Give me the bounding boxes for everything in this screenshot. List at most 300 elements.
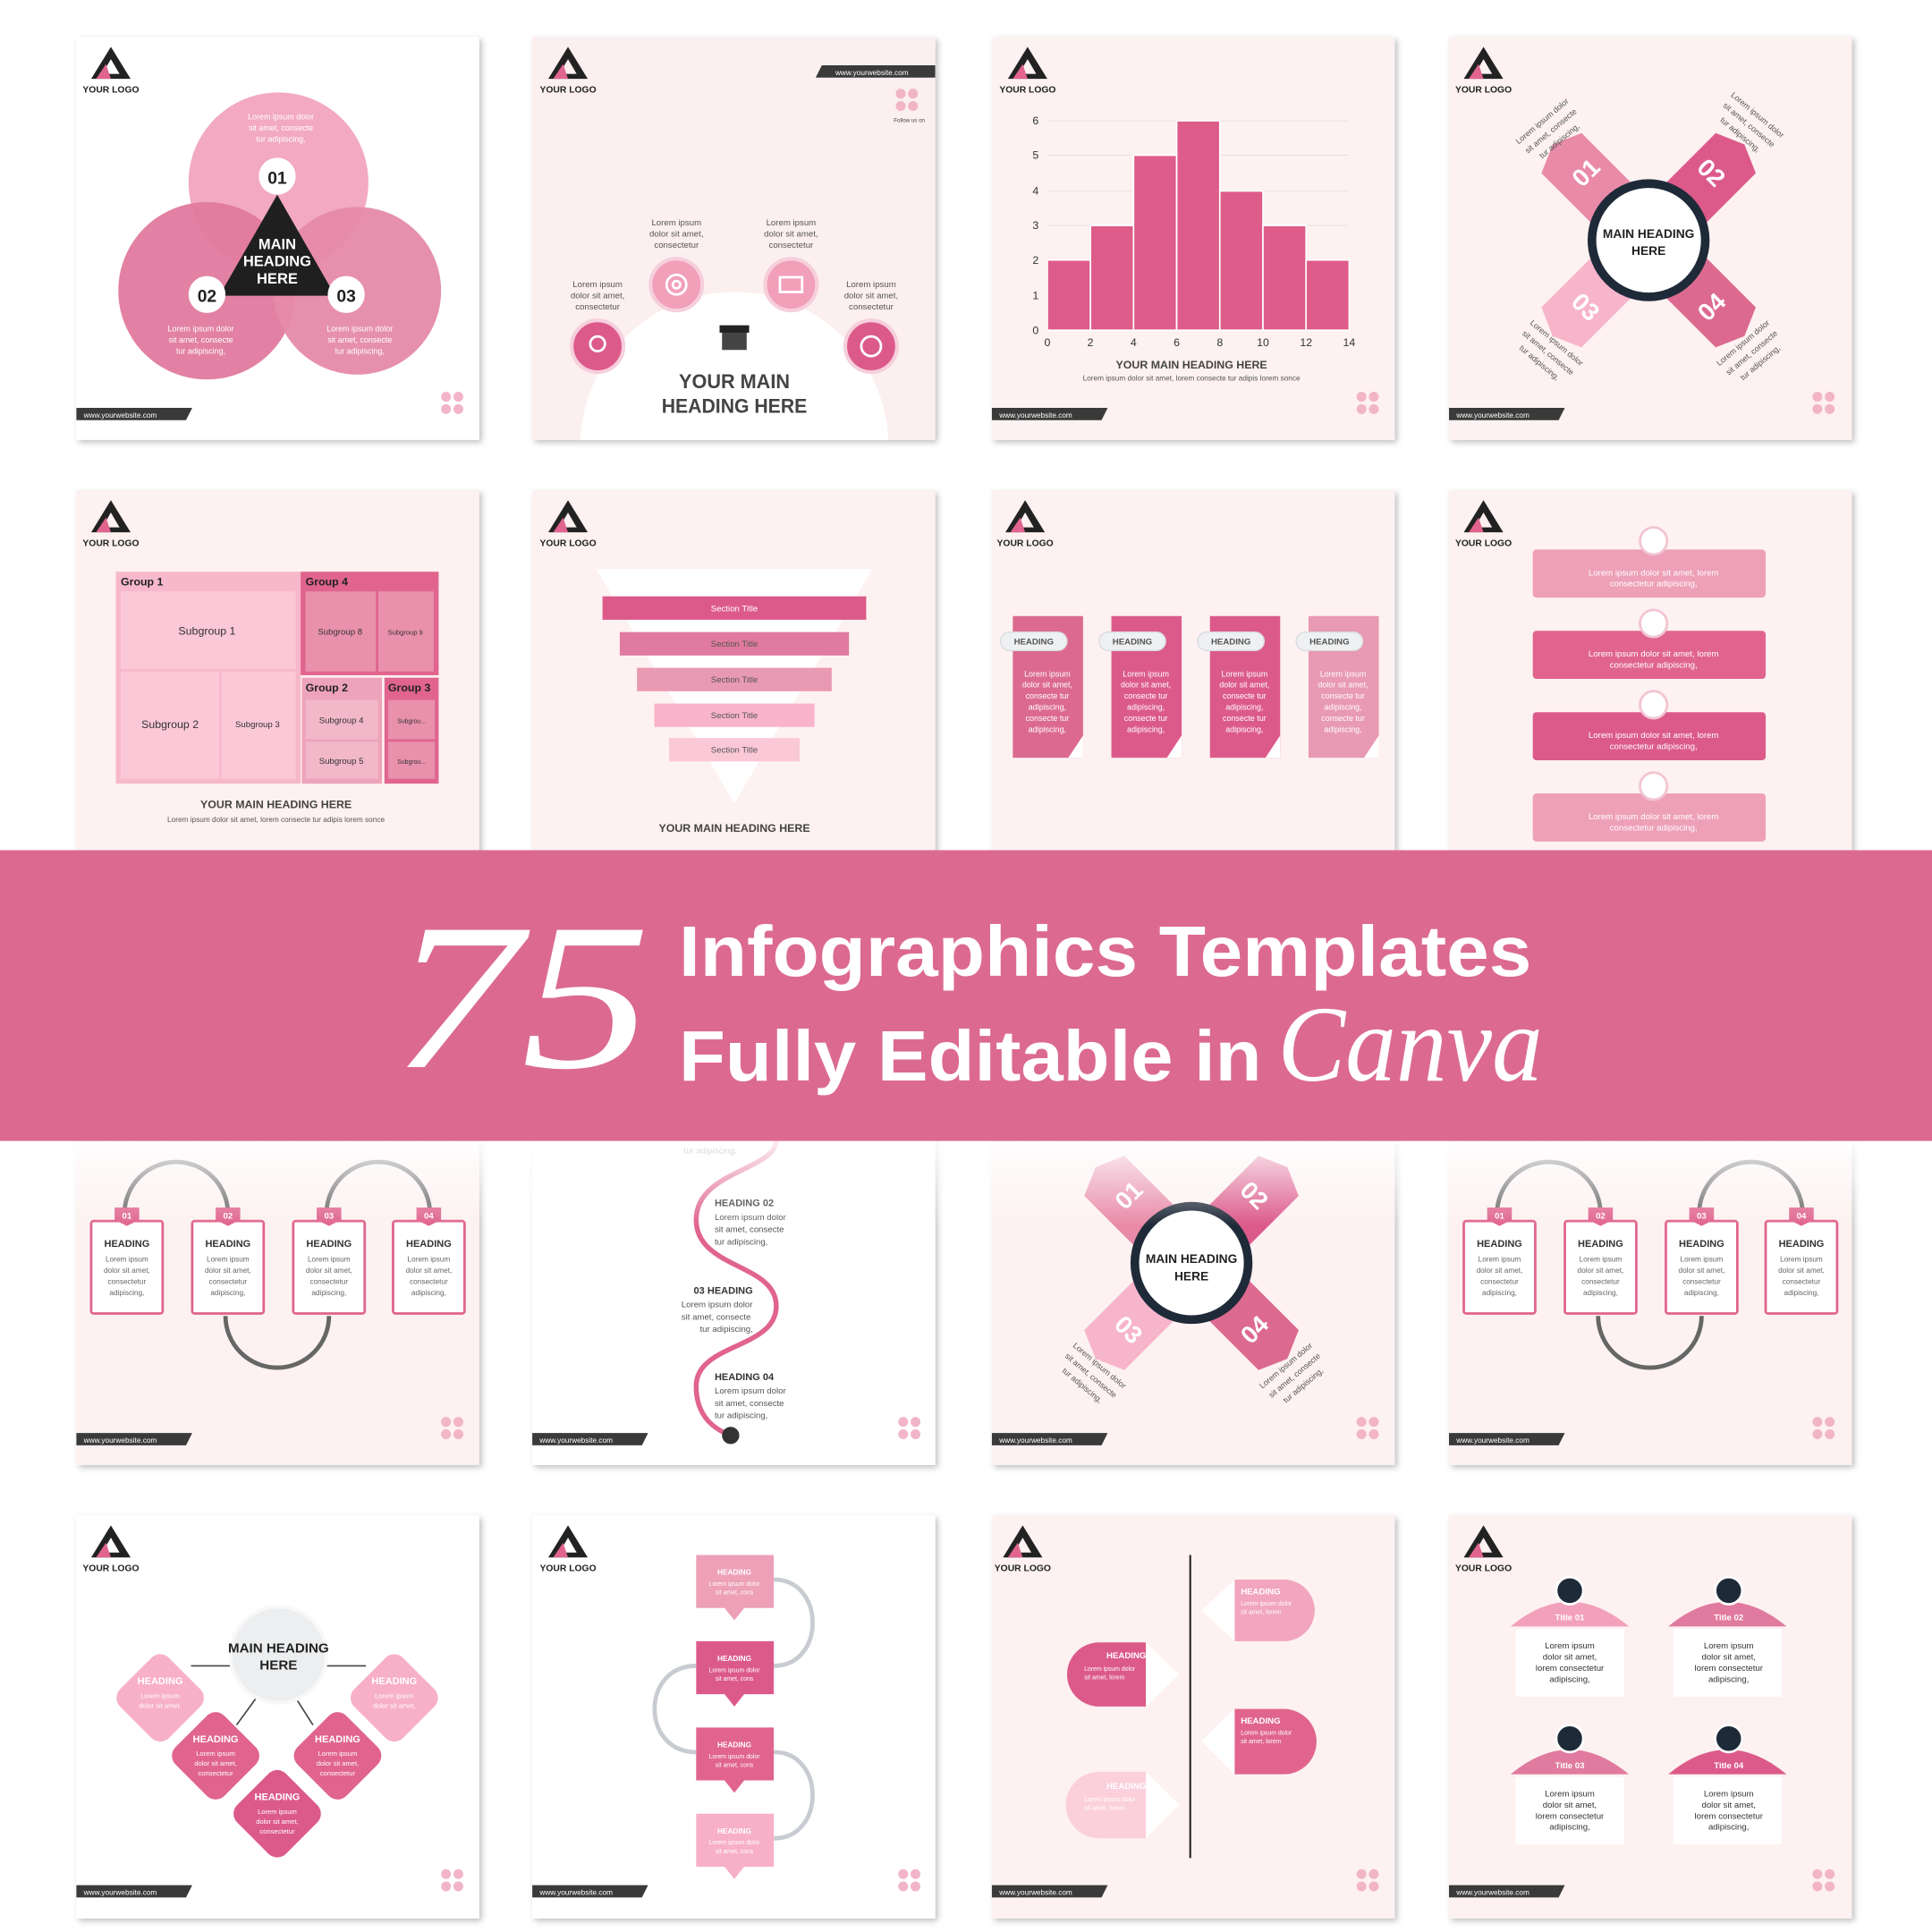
card 1: venn diagram: tur adipiscing, [257,134,306,143]
logos: YOUR LOGO [995,1563,1051,1573]
card 5: treemap: Subgroup 5 [319,757,363,767]
card 5: treemap: Subgroup 9 [388,628,423,636]
card 3: bar chart: 3 [1032,219,1038,232]
card 10: wave timeline: Lorem ipsum dolor [682,1301,753,1310]
card 12: loop steps: dolor sit amet, [1778,1267,1825,1275]
card 12: loop steps: Lorem ipsum [1780,1256,1823,1264]
card 10: wave timeline: sit amet, consecte [715,1399,784,1409]
card 12: loop steps: dolor sit amet, [1578,1267,1623,1275]
card 2: semicircle icons [570,118,925,440]
card 1: venn diagram: 02 [198,287,216,306]
card 5: treemap: Lorem ipsum dolor sit amet, lorem consecte tur adipis lorem sonce [167,816,385,824]
card 7: heading columns: Lorem ipsum [1123,669,1169,678]
card 16: title tiles: Title 04 [1714,1761,1744,1771]
card 1: venn diagram: HERE [257,270,298,287]
card 2: semicircle icons: dolor sit amet, [844,291,898,301]
card 9: loop steps: dolor sit amet, [306,1267,352,1275]
card 8: list bars: Lorem ipsum dolor sit amet, lorem [1589,568,1718,578]
card 13: diamond hierarchy: consectetur [199,1769,233,1777]
card 9: loop steps: consectetur [209,1277,247,1285]
card 4: X diagram: sit amet, consecte [1724,328,1779,377]
card 8: list bars: consectetur adipiscing, [1610,661,1698,671]
card 8: list bars: consectetur adipiscing, [1610,823,1698,833]
card 15: vertical timeline: Lorem ipsum dolor [1241,1601,1292,1607]
logos: YOUR LOGO [999,85,1055,95]
footers: www.yourwebsite.com [1455,1889,1530,1897]
card 4: X diagram: sit amet, consecte [1721,101,1776,149]
card 11: X diagram: tur adipiscing, [1061,1366,1104,1404]
card 12: loop steps: 03 [1697,1211,1707,1221]
logos: YOUR LOGO [539,1563,597,1573]
card 5: treemap: Subgroup 3 [235,720,280,730]
card 7: heading columns: adipiscing, [1225,724,1263,733]
card 4: X diagram: 01 [1566,153,1606,192]
card 15: vertical timeline: Lorem ipsum dolor [1084,1666,1136,1673]
logos: YOUR LOGO [82,85,140,95]
card 4: X diagram: Lorem ipsum dolor [1529,318,1585,368]
card 10: wave timeline: tur adipiscing, [715,1237,767,1247]
footers: www.yourwebsite.com [998,411,1072,419]
card 12: loop steps: consectetur [1682,1277,1721,1285]
card 2: semicircle icons: dolor sit amet, [764,229,818,239]
logos: YOUR LOGO [997,538,1054,548]
card 8: list bars: consectetur adipiscing, [1610,742,1698,752]
card 10: wave timeline [682,1140,786,1444]
card 9: loop steps: 02 [223,1211,233,1221]
card 7: heading columns: HEADING [1309,637,1350,647]
footers: www.yourwebsite.com [538,1436,613,1445]
card 13: diamond hierarchy: dolor sit amet, [139,1701,182,1709]
card 16: title tiles: dolor sit amet, [1543,1653,1597,1663]
card 12: loop steps: dolor sit amet, [1678,1267,1724,1275]
card 9: loop steps: HEADING [406,1239,452,1250]
footers: www.yourwebsite.com [1455,411,1530,419]
card 12: loop steps: HEADING [1578,1239,1623,1250]
card 5: treemap: Subgroup 8 [318,627,362,637]
card 3: bar chart: 2 [1088,336,1094,349]
card 15: vertical timeline: sit amet, lorem [1241,1739,1282,1745]
banner headline: Canva [1278,985,1543,1105]
card 7: heading columns: consecte tur [1026,691,1069,700]
card 4: X diagram: MAIN HEADING [1603,227,1694,241]
footers: www.yourwebsite.com [83,1436,157,1445]
card 4: X diagram: 03 [1566,287,1606,326]
card 10: wave timeline: 03 HEADING [694,1285,753,1296]
card 10: wave timeline: tur adipiscing, [699,1325,753,1335]
card 6: funnel: Section Title [711,746,758,756]
card 1: venn diagram: 01 [267,169,287,188]
card 13: diamond hierarchy: HEADING [315,1734,360,1745]
card 15: vertical timeline: HEADING [1241,1588,1281,1597]
card 6: funnel: Section Title [711,604,758,614]
card 16: title tiles: adipiscing, [1549,1674,1590,1684]
card 13: diamond hierarchy: consectetur [320,1769,355,1777]
card 15: vertical timeline: Lorem ipsum dolor [1084,1797,1136,1803]
card 12: loop steps: consectetur [1783,1277,1821,1285]
card 9: loop steps: adipiscing, [210,1289,245,1297]
card 7: heading columns: dolor sit amet, [1022,681,1072,690]
card 2: semicircle icons: consectetur [849,302,894,312]
card 1: venn diagram: HEADING [243,253,311,270]
card 10: wave timeline: Lorem ipsum dolor [715,1213,786,1223]
card 15: vertical timeline: Lorem ipsum dolor [1241,1731,1292,1737]
card 10: wave timeline: sit amet, consecte [715,1225,784,1235]
card 15: vertical timeline: HEADING [1241,1716,1281,1726]
card 5: treemap: Group 4 [306,575,348,588]
card 9: loop steps: consectetur [410,1277,448,1285]
card 5: treemap: YOUR MAIN HEADING HERE [200,799,352,811]
card 4: X diagram: tur adipiscing, [1718,115,1762,154]
card 16: title tiles: adipiscing, [1708,1823,1749,1833]
card 12: loop steps: adipiscing, [1784,1289,1818,1297]
card 6: funnel: Section Title [711,711,758,721]
logos: YOUR LOGO [82,538,140,548]
card 13: diamond hierarchy: MAIN HEADING [228,1640,329,1656]
card 12: loop steps: consectetur [1581,1277,1620,1285]
card 16: title tiles: lorem consectetur [1694,1664,1764,1674]
card 5: treemap: Subgrou... [397,759,426,766]
card 11: X diagram [1061,1147,1325,1404]
card 10: wave timeline: sit amet, consecte [682,1312,750,1322]
card 2: semicircle icons: Lorem ipsum [767,218,816,228]
card 9: loop steps: dolor sit amet, [405,1267,452,1275]
card 7: heading columns [1001,616,1378,758]
card 9: loop steps: Lorem ipsum [207,1256,250,1264]
card 7: heading columns: HEADING [1014,637,1054,647]
card 1: venn diagram: tur adipiscing, [176,346,225,355]
card 15: vertical timeline: HEADING [1106,1782,1146,1792]
card 13: diamond hierarchy: HEADING [371,1676,417,1687]
card 11: X diagram: 04 [1235,1309,1275,1349]
card 3: bar chart: 10 [1257,336,1269,349]
card 12: loop steps: 04 [1797,1211,1807,1221]
card 12: loop steps: Lorem ipsum [1681,1256,1723,1264]
card 13: diamond hierarchy: dolor sit amet, [256,1818,299,1826]
card 7: heading columns: Lorem ipsum [1024,669,1071,678]
banner headline [679,911,1543,1105]
card 1: venn diagram: Lorem ipsum dolor [168,325,234,334]
logos: YOUR LOGO [82,1563,140,1573]
card 7: heading columns: adipiscing, [1225,702,1263,711]
card 2: semicircle icons: consectetur [575,302,621,312]
card 16: title tiles: Title 01 [1555,1613,1585,1623]
card 1: venn diagram: sit amet, consecte [327,335,392,344]
card 11: X diagram: Lorem ipsum dolor [1072,1341,1128,1390]
card 13: diamond hierarchy: HEADING [138,1676,182,1687]
card 16: title tiles [1511,1577,1786,1844]
card 8: list bars: Lorem ipsum dolor sit amet, lorem [1589,649,1718,659]
card 10: wave timeline: tur adipiscing, [715,1411,767,1421]
card 9: loop steps: Lorem ipsum [408,1256,450,1264]
card 2: semicircle icons: Lorem ipsum [572,280,623,290]
card 3: bar chart: 4 [1032,185,1038,198]
card 4: X diagram [1514,90,1786,382]
banner number 75: 75 [392,880,650,1113]
logos [82,47,1512,1573]
card 14: snake steps: sit amet, cons [716,1590,754,1597]
card 11: X diagram: MAIN HEADING [1146,1252,1237,1266]
card 1: venn diagram: Lorem ipsum dolor [248,113,314,122]
card 5: treemap: Group 3 [388,682,430,694]
card 9: loop steps: 01 [123,1211,132,1221]
card 13: diamond hierarchy [112,1606,443,1862]
card 14: snake steps: HEADING [717,1741,751,1749]
card 4: X diagram: sit amet, consecte [1521,328,1576,377]
card 14: snake steps [655,1555,812,1879]
card 7: heading columns: adipiscing, [1029,724,1066,733]
card 12: loop steps: adipiscing, [1583,1289,1618,1297]
card 13: diamond hierarchy: Lorem ipsum [318,1750,357,1758]
card 12: loop steps: 01 [1495,1211,1504,1221]
card 9: loop steps: dolor sit amet, [205,1267,251,1275]
card 9: loop steps: Lorem ipsum [106,1256,148,1264]
card 7: heading columns: Lorem ipsum [1221,669,1267,678]
card 4: X diagram: Lorem ipsum dolor [1514,97,1571,146]
card 4: X diagram: sit amet, consecte [1523,106,1579,155]
card 11: X diagram: tur adipiscing, [1282,1366,1325,1404]
card 12: loop steps: Lorem ipsum [1479,1256,1521,1264]
card 7: heading columns: consecte tur [1223,691,1267,700]
card 12: loop steps: HEADING [1679,1239,1724,1250]
card 12: loop steps: adipiscing, [1684,1289,1719,1297]
card 4: X diagram: tur adipiscing, [1518,343,1561,382]
card 12: loop steps: dolor sit amet, [1477,1267,1522,1275]
card 4: X diagram: 04 [1692,287,1732,326]
card 13: diamond hierarchy: Lorem ipsum [140,1691,180,1699]
card 3: bar chart: 1 [1032,290,1038,302]
card 16: title tiles: adipiscing, [1549,1823,1590,1833]
card 2: semicircle icons: consectetur [654,241,699,250]
card 10: wave timeline: tur adipiscing, [684,1146,737,1156]
card 12: loop steps: Lorem ipsum [1580,1256,1622,1264]
card 11: X diagram: Lorem ipsum dolor [1258,1341,1314,1390]
card 14: snake steps: HEADING [717,1569,751,1577]
card 14: snake steps: sit amet, cons [716,1676,754,1682]
card 2: semicircle icons: consectetur [769,241,814,250]
card 14: snake steps: Lorem ipsum dolor [709,1840,760,1846]
card 14: snake steps: Lorem ipsum dolor [709,1667,760,1674]
card 1: venn diagram: MAIN [258,235,296,252]
card 12: loop steps: HEADING [1477,1239,1522,1250]
card 13: diamond hierarchy: Lorem ipsum [375,1691,414,1699]
card 2: semicircle icons: HEADING HERE [662,394,807,417]
card 13: diamond hierarchy: consectetur [259,1827,295,1835]
logos: YOUR LOGO [1455,538,1512,548]
card 7: heading columns: HEADING [1113,637,1152,647]
card 9: loop steps: Lorem ipsum [308,1256,351,1264]
card 3: bar chart: 12 [1300,336,1312,349]
footers: www.yourwebsite.com [998,1889,1072,1897]
card 7: heading columns: Lorem ipsum [1320,669,1366,678]
card 11: X diagram: 02 [1234,1176,1274,1215]
card 6: funnel: Section Title [711,640,758,649]
card 15: vertical timeline: HEADING [1106,1651,1146,1661]
footers: www.yourwebsite.com [83,1889,157,1897]
card 14: snake steps: sit amet, cons [716,1762,754,1768]
card 7: heading columns: adipiscing, [1127,724,1165,733]
card 3: bar chart: 6 [1174,336,1180,349]
card 9: loop steps: 04 [424,1211,434,1221]
logos: YOUR LOGO [1455,85,1512,95]
card 8: list bars [1533,528,1766,842]
card 9: loop steps: dolor sit amet, [104,1267,150,1275]
card 7: heading columns: HEADING [1211,637,1250,647]
card 9: loop steps: HEADING [306,1239,352,1250]
card 14: snake steps: HEADING [717,1655,751,1663]
card 3: bar chart: 5 [1032,149,1038,162]
card 3: bar chart: 2 [1032,254,1038,267]
card 12: loop steps [1464,1162,1837,1368]
card 5: treemap [115,572,438,824]
card 10: wave timeline: Lorem ipsum dolor [715,1386,786,1396]
card 5: treemap: Subgroup 1 [178,624,236,637]
card 16: title tiles: dolor sit amet, [1701,1801,1756,1810]
card 6: funnel: YOUR MAIN HEADING HERE [658,822,810,835]
card 1: venn diagram: tur adipiscing, [335,346,385,355]
card 12: loop steps: HEADING [1779,1239,1824,1250]
card 7: heading columns: consecte tur [1321,691,1365,700]
card 3: bar chart: 0 [1044,336,1050,349]
card 7: heading columns: consecte tur [1321,714,1365,723]
card 15: vertical timeline: sit amet, lorem [1084,1675,1125,1682]
card 11: X diagram: 01 [1109,1176,1148,1215]
card 4: X diagram: tur adipiscing, [1538,122,1581,160]
card 2: semicircle icons: Follow us on [894,117,926,123]
card 16: title tiles: Lorem ipsum [1545,1789,1595,1799]
card 9: loop steps: adipiscing, [311,1289,346,1297]
card 16: title tiles: Title 02 [1714,1613,1743,1623]
card 16: title tiles: Title 03 [1555,1761,1585,1771]
card 3: bar chart: 4 [1131,336,1137,349]
card 10: wave timeline: HEADING 02 [715,1199,774,1209]
card 2: semicircle icons: dolor sit amet, [571,291,624,301]
card 14: snake steps: sit amet, cons [716,1849,754,1855]
card 13: diamond hierarchy: Lorem ipsum [258,1808,297,1816]
card 15: vertical timeline: sit amet, lorem [1084,1806,1125,1812]
card 9: loop steps: HEADING [104,1239,149,1250]
card 7: heading columns: dolor sit amet, [1219,681,1269,690]
card 7: heading columns: adipiscing, [1324,724,1362,733]
banner headline: Fully Editable in [679,1016,1262,1096]
card 5: treemap: Group 1 [121,575,164,588]
card 7: heading columns: consecte tur [1223,714,1267,723]
card 9: loop steps: adipiscing, [411,1289,446,1297]
logos: YOUR LOGO [1455,1563,1512,1573]
card 7: heading columns: consecte tur [1026,714,1069,723]
card 13: diamond hierarchy: Lorem ipsum [196,1750,235,1758]
card 6: funnel: Section Title [711,675,758,685]
logos: YOUR LOGO [539,538,597,548]
card 7: heading columns: consecte tur [1124,714,1167,723]
card 3: bar chart: 0 [1032,324,1038,336]
card 11: X diagram: sit amet, consecte [1267,1352,1322,1400]
footers: www.yourwebsite.com [1455,1436,1530,1445]
card 15: vertical timeline [1066,1555,1317,1858]
card 7: heading columns: dolor sit amet, [1318,681,1368,690]
card 4: X diagram: Lorem ipsum dolor [1715,318,1771,368]
card 9: loop steps: adipiscing, [109,1289,144,1297]
card 9: loop steps: consectetur [108,1277,146,1285]
card 3: bar chart: 14 [1343,336,1355,349]
card 4: X diagram: 02 [1692,153,1731,192]
card 11: X diagram: 03 [1109,1310,1148,1349]
card 3: bar chart: 6 [1032,114,1038,127]
card 7: heading columns: adipiscing, [1324,702,1362,711]
card 12: loop steps: consectetur [1480,1277,1519,1285]
card 11: X diagram: HERE [1174,1269,1208,1283]
card 9: loop steps: HEADING [205,1239,250,1250]
card 16: title tiles: dolor sit amet, [1543,1801,1597,1810]
card 16: title tiles: Lorem ipsum [1704,1789,1754,1799]
card 13: diamond hierarchy: HERE [259,1658,297,1674]
card 16: title tiles: Lorem ipsum [1545,1641,1595,1651]
card 4: X diagram: tur adipiscing, [1739,343,1782,382]
card 12: loop steps: 02 [1596,1211,1606,1221]
card 2: semicircle icons: YOUR MAIN [679,370,790,393]
logos: YOUR LOGO [539,85,597,95]
card 2: semicircle icons: dolor sit amet, [649,229,704,239]
card 1: venn diagram: Lorem ipsum dolor [326,325,393,334]
card 16: title tiles: dolor sit amet, [1701,1653,1756,1663]
card 1: venn diagram: sit amet, consecte [169,335,233,344]
card 7: heading columns: adipiscing, [1029,702,1066,711]
card 13: diamond hierarchy: dolor sit amet, [317,1759,359,1767]
card 13: diamond hierarchy: dolor sit amet, [194,1759,237,1767]
footers: www.yourwebsite.com [538,1889,613,1897]
card 9: loop steps [91,1162,464,1368]
card 3: bar chart [1032,114,1355,383]
card 5: treemap: Subgroup 2 [141,718,199,731]
card 3: bar chart: Lorem ipsum dolor sit amet, lorem consecte tur adipis lorem sonce [1083,375,1301,383]
card 7: heading columns: dolor sit amet, [1121,681,1171,690]
card 14: snake steps: Lorem ipsum dolor [709,1754,760,1760]
footers: www.yourwebsite.com [835,69,909,77]
banner [0,851,1932,1141]
card 3: bar chart: 8 [1216,336,1223,349]
card 8: list bars: consectetur adipiscing, [1610,580,1698,589]
card 9: loop steps: consectetur [309,1277,348,1285]
card 13: diamond hierarchy: dolor sit amet, [373,1701,416,1709]
card 7: heading columns: adipiscing, [1127,702,1165,711]
footers: www.yourwebsite.com [83,411,157,419]
card 6: funnel [597,569,872,835]
card 2: semicircle icons: Lorem ipsum [651,218,701,228]
card 13: diamond hierarchy: HEADING [255,1792,300,1803]
card 1: venn diagram: sit amet, consecte [249,123,313,132]
card 10: wave timeline: HEADING 04 [715,1372,775,1383]
card 13: diamond hierarchy: HEADING [193,1734,238,1745]
card 16: title tiles: lorem consectetur [1536,1811,1605,1821]
card 4: X diagram: Lorem ipsum dolor [1729,90,1786,140]
card 7: heading columns: consecte tur [1124,691,1167,700]
card 8: list bars: Lorem ipsum dolor sit amet, lorem [1589,731,1718,741]
card 8: list bars: Lorem ipsum dolor sit amet, lorem [1589,812,1718,822]
card 11: X diagram: sit amet, consecte [1063,1352,1119,1400]
banner headline: Infographics Templates [679,911,1531,991]
card 14: snake steps: HEADING [717,1827,751,1835]
footers: www.yourwebsite.com [998,1436,1072,1445]
card 1: venn diagram: 03 [336,287,356,306]
card 3: bar chart: YOUR MAIN HEADING HERE [1116,359,1267,371]
card 9: loop steps: 03 [324,1211,334,1221]
card 15: vertical timeline: sit amet, lorem [1241,1610,1282,1616]
card 5: treemap: Subgroup 4 [319,716,364,726]
card 1: venn diagram [118,92,441,379]
card 16: title tiles: lorem consectetur [1694,1811,1764,1821]
card 16: title tiles: lorem consectetur [1536,1664,1605,1674]
card 14: snake steps: Lorem ipsum dolor [709,1581,760,1588]
card 16: title tiles: adipiscing, [1708,1674,1749,1684]
